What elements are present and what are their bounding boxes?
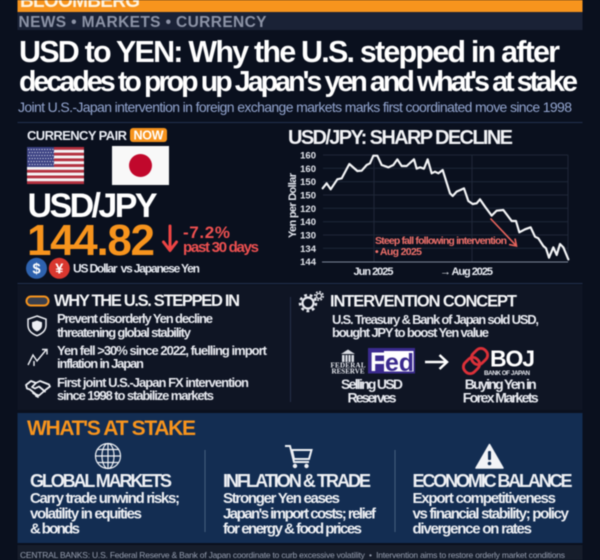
percentage change: past 30 days [183,239,259,256]
section heading: WHAT'S AT STAKE [27,417,196,440]
caption: selling USD: Selling USD [341,376,403,392]
line chart: 120 [300,204,316,215]
concept description: bought JPY to boost Yen value [332,325,489,340]
section heading: WHY THE U.S. STEPPED IN [54,292,240,310]
caption: buying yen: Forex Markets [463,390,539,406]
logo: Fed [368,347,415,377]
title: decades to prop up Japan's yen and what's at stake [19,66,578,98]
now badge: NOW [134,128,164,142]
subtitle: Joint U.S.-Japan intervention in foreign exchange markets marks first coordinated move since 1998 [18,99,572,115]
column: economic balance: ECONOMIC BALANCE [412,471,572,491]
footer note [18,545,582,560]
bullet: first joint intervention: since 1998 to stabilize markets [57,388,214,403]
panel: lower section background [18,285,582,410]
title [19,35,578,98]
column: inflation and trade: Stronger Yen eases [223,490,340,507]
header: source and category bands [18,0,582,31]
logo: Federal Reserve: RESERVE [332,368,365,376]
icon: yen coin: ¥ [55,262,63,278]
currency pair label: CURRENCY PAIR [27,128,128,143]
column: global markets: volatility in equities [30,506,142,522]
panel: intervention concept [300,292,539,406]
icon: shield [28,316,46,336]
line chart: 144 [300,257,317,268]
line chart: 130 [300,230,316,242]
logo: Fed: F [370,347,385,377]
bullet: prevent decline [57,311,213,340]
caption: selling USD: Reserves [348,390,397,406]
category strip: NEWS • MARKETS • CURRENCY [18,14,267,31]
column: global markets: & bonds [30,520,80,538]
chart annotation: • Aug 2025 [375,246,422,258]
panel: price chart [287,127,568,278]
pair name: USD/JPY [28,187,158,225]
panel: currency pair [26,128,259,279]
logo: Federal Reserve: FEDERAL [330,362,366,370]
concept description [332,312,539,340]
icon: yen coin [49,258,70,279]
footer note: CENTRAL BANKS: U.S. Federal Reserve & Bank of Japan coordinate to curb excessive volatility • Intervention aims to restore orderly market conditions [20,550,565,560]
percentage change [183,223,259,256]
logo: BOJ: BOJ [490,346,535,372]
icon: trend chart [28,350,47,366]
icon: US flag [27,147,84,184]
column: inflation and trade: INFLATION & TRADE [223,471,371,491]
line chart: 140 [300,217,316,228]
logo: BOJ: BANK OF JAPAN [484,370,530,377]
icon: orange pill [26,296,48,306]
column: inflation and trade [223,471,377,538]
bullet: yen fell: inflation in Japan [57,356,144,371]
section heading: INTERVENTION CONCEPT [330,292,517,310]
icon: globe [96,444,120,468]
arrow: selling to buying [425,355,447,369]
icon: shopping cart [285,446,312,468]
chart annotation [375,235,507,258]
column: global markets: Carry trade unwind risks; [30,490,180,507]
column: economic balance [412,471,572,538]
panel: why the U.S. stepped in [26,292,268,403]
column: inflation and trade: Japan's import costs; relief [223,506,377,522]
caption: buying yen [463,376,539,406]
column: global markets [30,471,180,538]
logo: Fed: ed [385,349,414,377]
percentage change: -7.2% [183,223,230,242]
caption: selling USD [341,376,403,406]
arrow: steep fall [490,218,516,246]
column: inflation and trade: for energy & food prices [223,520,362,538]
column: economic balance: vs financial stability; policy [412,506,570,522]
line chart: 150 [300,190,316,202]
category strip [18,12,582,31]
line chart: 160 [300,150,316,162]
logo: Federal Reserve [330,350,366,376]
icon: down arrow [164,226,176,250]
line chart [300,150,568,278]
concept description: U.S. Treasury & Bank of Japan sold USD, [332,312,539,327]
bullet: prevent decline: Prevent disorderly Yen decline [57,311,213,326]
bullet: prevent decline: threatening global stability [57,325,192,340]
title: USD to YEN: Why the U.S. stepped in after [19,35,560,69]
icon: dollar coin: $ [32,262,41,278]
logo: BOJ [461,346,535,377]
line chart: 160 [300,164,316,175]
chart title: USD/JPY: SHARP DECLINE [288,127,513,149]
chart annotation: Steep fall following intervention [375,235,507,247]
line chart: → Aug 2025 [440,266,493,278]
line chart: 150 [300,177,316,188]
y axis title: Yen per Dollar [287,172,299,238]
panel: what's at stake [18,413,582,543]
bullet: yen fell [57,343,268,371]
bullet: first joint intervention [57,375,249,403]
icon: dollar coin [26,258,47,279]
line chart: Jun 2025 [354,266,394,278]
source bar [18,0,582,12]
bullet: first joint intervention: First joint U.S.-Japan FX intervention [57,375,249,390]
icon: handshake [26,381,50,397]
icon: warning triangle [476,444,503,468]
exchange rate: 144.82 [27,216,155,265]
column: economic balance: divergence on rates [412,520,532,538]
currency names: US Dollar vs Japanese Yen [73,262,200,276]
column: global markets: GLOBAL MARKETS [30,471,172,491]
caption: buying yen: Buying Yen in [465,376,537,392]
bullet: yen fell: Yen fell >30% since 2022, fuelling import [57,343,268,358]
line chart: 134 [300,244,317,255]
column: economic balance: Export competitiveness [412,490,556,507]
icon: Japan flag [112,146,169,185]
icon: gears [300,292,323,311]
